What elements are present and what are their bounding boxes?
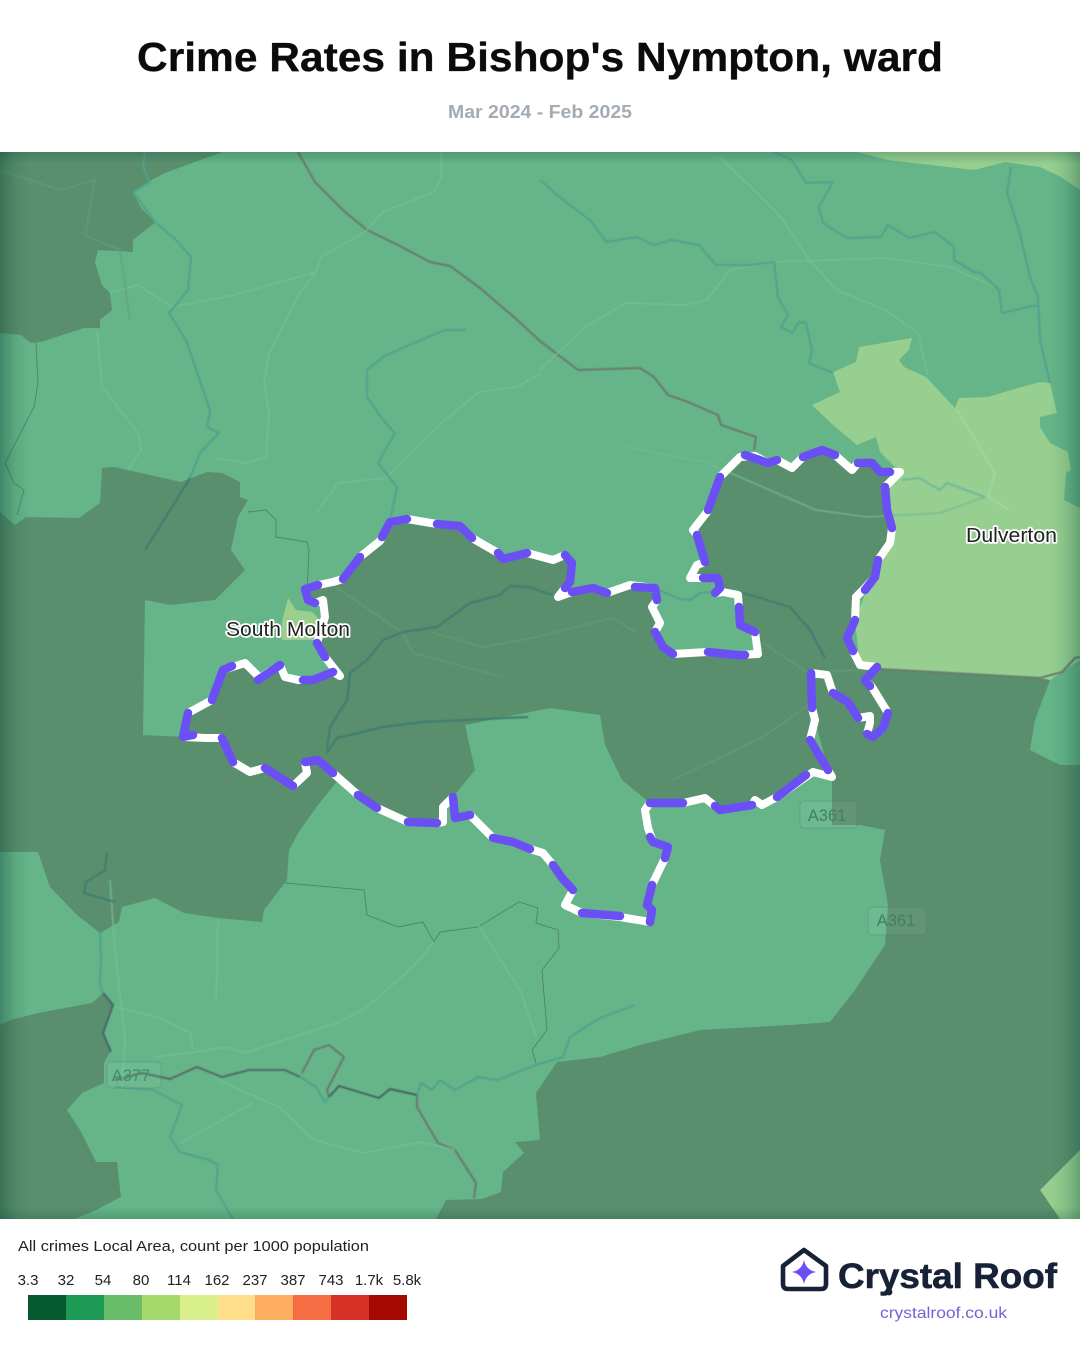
- icon: house with star: [783, 1250, 826, 1289]
- legend value labels: 5.8k: [393, 1272, 422, 1289]
- light-green crime area: Dulverton: [282, 152, 1080, 1219]
- map panel: [0, 152, 1080, 1219]
- wordmark key detail: [886, 1289, 892, 1295]
- legend: [18, 1238, 422, 1320]
- rivers: [100, 152, 1050, 1219]
- road label: A361 south: [868, 907, 926, 935]
- road label: A377: A377: [112, 1067, 150, 1085]
- legend value labels: [18, 1272, 422, 1289]
- wordmark: Crystal Roof: [838, 1257, 1057, 1296]
- legend value labels: 54: [95, 1272, 111, 1289]
- website: crystalroof.co.uk: [880, 1305, 1008, 1322]
- title: Crime Rates in Bishop's Nympton, ward: [137, 34, 943, 80]
- place label: Dulverton: Dulverton: [966, 524, 1057, 547]
- legend colour scale: [28, 1295, 407, 1320]
- legend value labels: 1.7k: [355, 1272, 384, 1289]
- road label: A361 north: [800, 801, 857, 828]
- subtitle: date range: Mar 2024 - Feb 2025: [448, 102, 632, 122]
- ward boundary: white base line: [183, 450, 900, 922]
- legend value labels: 387: [280, 1272, 306, 1289]
- legend value labels: 3.3: [18, 1272, 38, 1289]
- dark-green crime areas: [0, 152, 1080, 1219]
- road label: A377: [107, 1062, 161, 1088]
- legend value labels: 743: [318, 1272, 344, 1289]
- legend value labels: 80: [133, 1272, 149, 1289]
- road network: [97, 152, 1009, 1153]
- grey administrative boundary lines: [103, 152, 1080, 1198]
- dark rivers inside dark areas: [84, 478, 825, 902]
- logo: Crystal Roof: [783, 1250, 1057, 1322]
- legend value labels: 237: [242, 1272, 268, 1289]
- thin parish boundary lines: [5, 343, 559, 1063]
- road label: A361 south: A361: [877, 912, 915, 930]
- place label: South Molton: South Molton: [226, 618, 350, 641]
- ward boundary: purple dashes: [183, 450, 892, 922]
- legend title: All crimes Local Area, count per 1000 population: [18, 1238, 369, 1255]
- map edge vignette: [0, 152, 1080, 1219]
- legend value labels: 32: [58, 1272, 74, 1289]
- legend value labels: 114: [167, 1272, 191, 1289]
- road label: A361 north: A361: [808, 807, 846, 825]
- roads inside dark areas: [0, 170, 985, 780]
- legend value labels: 162: [204, 1272, 230, 1289]
